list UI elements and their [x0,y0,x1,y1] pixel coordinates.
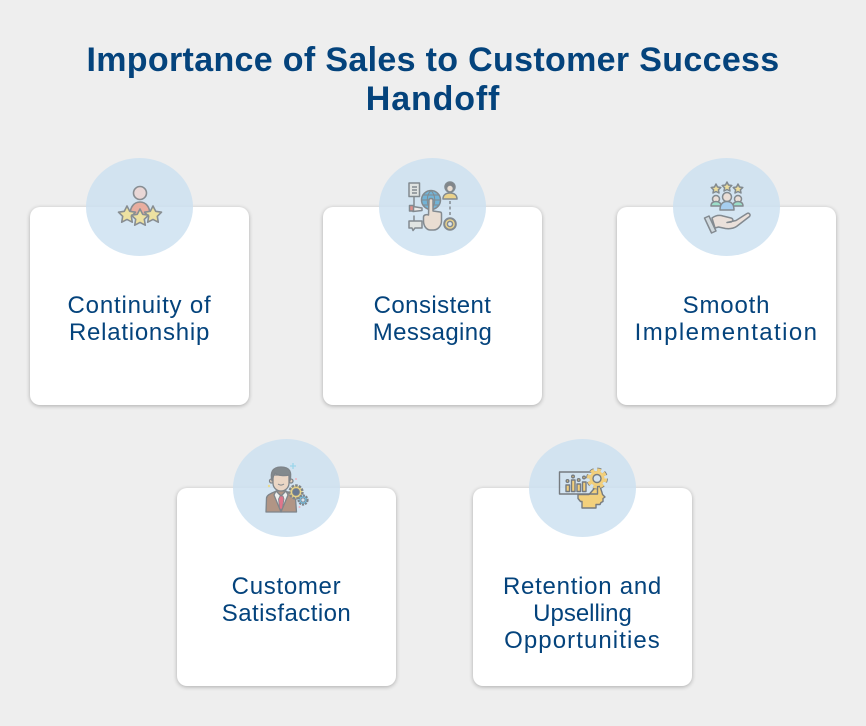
label: continuity of relationship: Relationship [69,319,210,346]
label: smooth implementation: Implementation [635,319,818,346]
label: customer satisfaction: Customer [232,573,341,600]
label: customer satisfaction: Satisfaction [222,600,351,627]
icon: analytics board and head with gear [529,439,636,537]
panel: smooth implementation [617,207,836,405]
panel: retention and upselling opportunities [473,488,692,686]
label: consistent messaging [373,292,492,346]
title [86,41,780,118]
label: continuity of relationship [68,292,211,346]
title: Importance of Sales to Customer Success [86,41,780,79]
icon: hand holding team and stars [673,158,780,256]
icon: globe, hand and messaging [379,158,486,256]
label: consistent messaging: Consistent [374,292,491,319]
panel: customer satisfaction [177,488,396,686]
panel: consistent messaging [323,207,542,405]
icon: person with three stars [86,158,193,256]
label: smooth implementation: Smooth [683,292,770,319]
panel: continuity of relationship [30,207,249,405]
label: smooth implementation [635,292,818,346]
label: continuity of relationship: Continuity of [68,292,211,319]
label: consistent messaging: Messaging [373,319,492,346]
label: retention and upselling opportunities: Retention and [503,573,662,600]
icon: businessman with gears [233,439,340,537]
label: retention and upselling opportunities: Upselling [533,600,632,627]
label: retention and upselling opportunities: Opportunities [504,627,661,654]
title: Handoff [366,80,500,118]
label: retention and upselling opportunities [503,573,662,654]
label: customer satisfaction [222,573,351,627]
